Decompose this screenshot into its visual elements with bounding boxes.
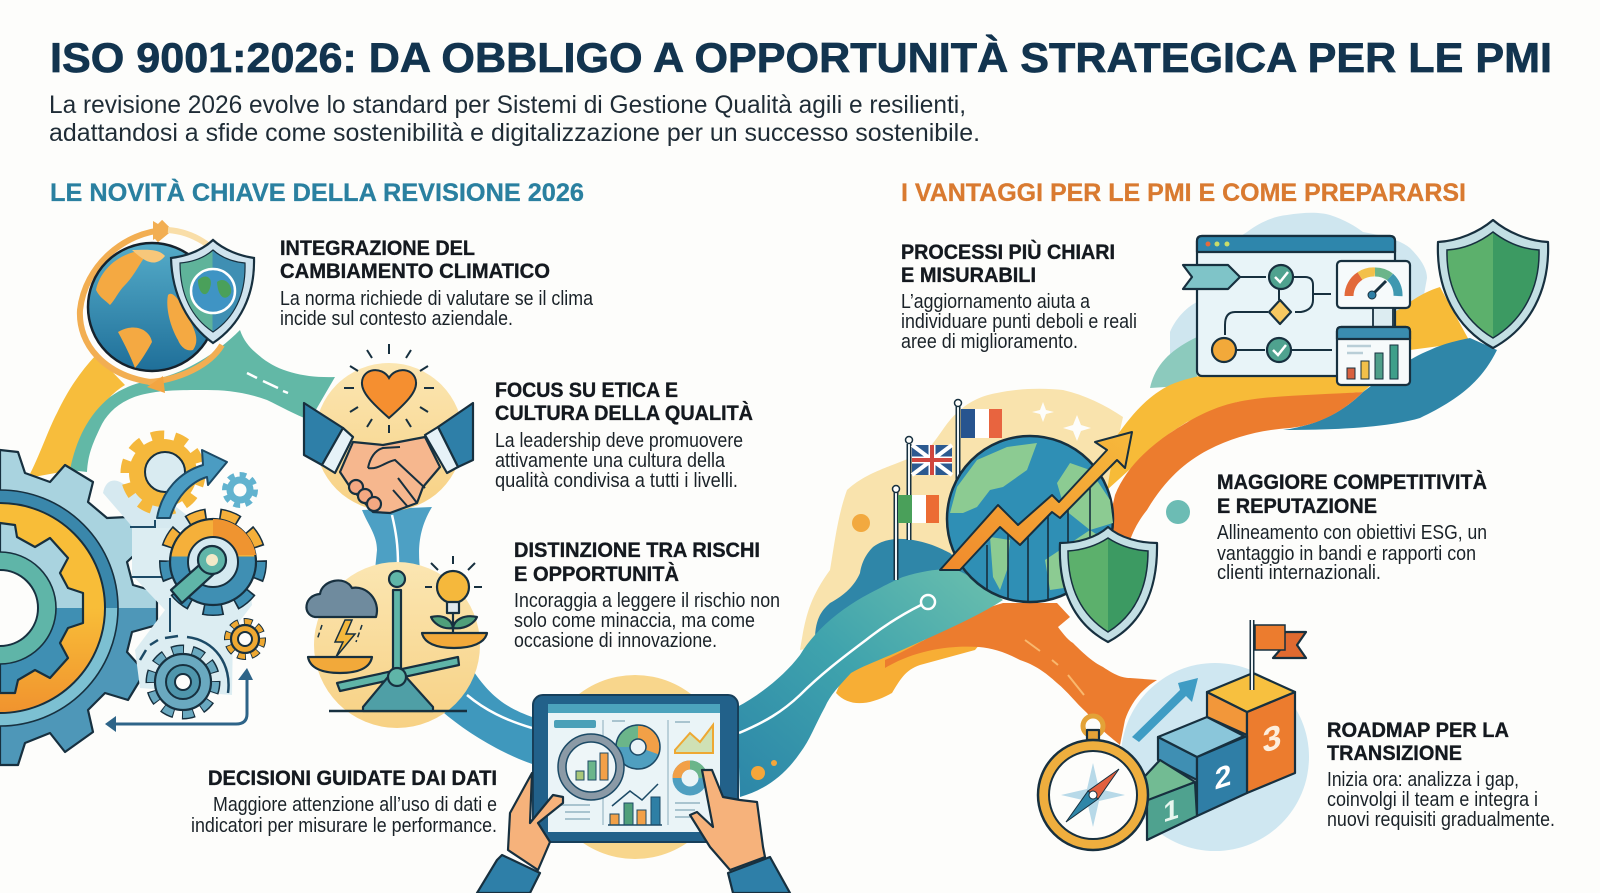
icon: teal dot bbox=[1166, 500, 1190, 524]
icon: left hand bbox=[508, 773, 563, 870]
text block: etica: CULTURA DELLA QUALITÀ bbox=[495, 402, 753, 425]
icon: process dashboard bbox=[1183, 236, 1410, 385]
icon: heart bbox=[362, 370, 416, 418]
icon: compass bbox=[1038, 716, 1148, 850]
icon: step 2: 2 bbox=[1215, 757, 1231, 797]
icon: left sleeve bbox=[304, 403, 343, 465]
text block: rischi: E OPPORTUNITÀ bbox=[514, 563, 679, 586]
icon: French flag bbox=[961, 409, 1002, 438]
icon: check step bbox=[1269, 265, 1293, 289]
text block: roadmap bbox=[1327, 719, 1555, 831]
text block: etica: La leadership deve promuovere bbox=[495, 429, 743, 452]
icon: right sleeve bbox=[728, 857, 790, 893]
text block: integrazione: incide sul contesto aziendale. bbox=[280, 307, 513, 330]
icon: blue gear bbox=[151, 650, 215, 714]
text block: processi: L’aggiornamento aiuta a bbox=[901, 290, 1091, 313]
text block: competitività bbox=[1217, 471, 1487, 584]
icon: step 1: 1 bbox=[1163, 793, 1179, 829]
icon: left sleeve bbox=[477, 855, 540, 893]
text block: dati bbox=[191, 767, 497, 837]
text block: processi: E MISURABILI bbox=[901, 264, 1036, 287]
text block: etica: FOCUS SU ETICA E bbox=[495, 379, 678, 402]
text block: competitività: clienti internazionali. bbox=[1217, 561, 1381, 584]
text block: roadmap: ROADMAP PER LA bbox=[1327, 719, 1509, 742]
text block: integrazione: La norma richiede di valutare se il clima bbox=[280, 287, 594, 310]
heading: vantaggi: I VANTAGGI PER LE PMI E COME PREPARARSI bbox=[901, 179, 1466, 207]
text block: competitività: E REPUTAZIONE bbox=[1217, 495, 1377, 518]
icon: orange dot bbox=[852, 514, 870, 532]
arrow: upward bbox=[1132, 678, 1198, 742]
icon: magnifier bbox=[558, 734, 624, 800]
subtitle: adattandosi a sfide come sostenibilità e digitalizzazione per un successo sostenibile. bbox=[49, 119, 980, 147]
text block: integrazione: CAMBIAMENTO CLIMATICO bbox=[280, 260, 550, 283]
text block: etica bbox=[495, 379, 753, 492]
icon: step 1 bbox=[1132, 760, 1197, 840]
text block: processi: PROCESSI PIÙ CHIARI bbox=[901, 240, 1115, 264]
text block: competitività: vantaggio in bandi e rapporti con bbox=[1217, 542, 1476, 565]
icon: lightbulb and plant bbox=[425, 556, 482, 633]
text block: competitività: MAGGIORE COMPETITIVITÀ bbox=[1217, 471, 1487, 494]
title: ISO 9001:2026: DA OBBLIGO A OPPORTUNITÀ STRATEGICA PER LE PMI bbox=[50, 34, 1552, 81]
icon: hands bbox=[340, 437, 440, 513]
text block: rischi: solo come minaccia, ma come bbox=[514, 609, 755, 632]
icon: shield with mini globe bbox=[171, 240, 254, 343]
icon: scale with risk and opportunity bbox=[306, 556, 487, 728]
icon: large green shield bbox=[1438, 220, 1548, 348]
icon: check step bbox=[1267, 338, 1291, 362]
icon: blue curved arrow bbox=[157, 450, 227, 518]
icon: storm cloud bbox=[306, 580, 377, 657]
icon: step 3: 3 bbox=[1263, 717, 1281, 761]
icon: gauge panel bbox=[1337, 261, 1410, 308]
text block: dati: DECISIONI GUIDATE DAI DATI bbox=[208, 767, 497, 790]
icon: UK flag bbox=[912, 445, 952, 475]
text block: etica: attivamente una cultura della bbox=[495, 449, 726, 472]
icon: flag on top bbox=[1252, 620, 1306, 690]
text block: rischi: occasione di innovazione. bbox=[514, 629, 717, 652]
icon: yellow gear bbox=[126, 436, 200, 510]
text block: processi: individuare punti deboli e reali bbox=[901, 310, 1137, 333]
text block: roadmap: TRANSIZIONE bbox=[1327, 742, 1462, 765]
text block: integrazione: INTEGRAZIONE DEL bbox=[280, 237, 475, 260]
icon: input tag bbox=[1183, 265, 1240, 289]
text block: roadmap: coinvolgi il team e integra i bbox=[1327, 788, 1538, 811]
text block: competitività: Allineamento con obiettivi ESG, un bbox=[1217, 521, 1487, 544]
icon: right sleeve bbox=[438, 403, 473, 467]
icon: donut chart bbox=[616, 725, 660, 769]
text block: rischi: DISTINZIONE TRA RISCHI bbox=[514, 539, 760, 562]
heading: novità chiave: LE NOVITÀ CHIAVE DELLA REVISIONE 2026 bbox=[50, 178, 584, 207]
icon: step 2 bbox=[1158, 717, 1247, 816]
arrow: growth bbox=[940, 432, 1132, 570]
icon: globe with growth arrow bbox=[940, 432, 1157, 642]
text block: roadmap: Inizia ora: analizza i gap, bbox=[1327, 768, 1519, 791]
icon: roadmap steps and compass bbox=[1038, 620, 1309, 851]
subtitle bbox=[49, 91, 980, 147]
icon: orange and blue gear with wrench bbox=[166, 515, 260, 609]
text block: rischi: Incoraggia a leggere il rischio non bbox=[514, 589, 780, 612]
icon: teal small gear bbox=[225, 475, 255, 505]
icon: heart and handshake bbox=[304, 344, 473, 513]
icon: step 3 bbox=[1207, 673, 1295, 793]
right flowing ribbons bbox=[737, 213, 1497, 797]
icon: bar chart with trend bbox=[608, 784, 662, 825]
icon: decision diamond bbox=[1269, 300, 1291, 324]
text block: processi: aree di miglioramento. bbox=[901, 330, 1078, 353]
text block: integrazione bbox=[280, 237, 594, 330]
text block: processi bbox=[901, 240, 1137, 353]
icon: green shield bbox=[1060, 527, 1157, 642]
icon: small yellow gear bbox=[228, 622, 262, 656]
icon: small gears cluster bbox=[103, 436, 262, 732]
icon: bar chart panel bbox=[1337, 327, 1410, 385]
icon: cuffs bbox=[322, 427, 458, 473]
text block: etica: qualità condivisa a tutti i livelli. bbox=[495, 469, 738, 492]
icon: start node bbox=[1212, 338, 1236, 362]
arrow: orbit around gear bbox=[140, 636, 229, 693]
icon: area chart bbox=[675, 725, 713, 753]
sparkles bbox=[1032, 402, 1091, 441]
text block: rischi bbox=[514, 539, 780, 652]
icon: flags bbox=[892, 400, 1002, 580]
text block: roadmap: nuovi requisiti gradualmente. bbox=[1327, 808, 1555, 831]
left connecting ribbons bbox=[28, 330, 535, 765]
text block: dati: Maggiore attenzione all’uso di dati e bbox=[213, 793, 497, 816]
icon: right hand pointing bbox=[690, 770, 765, 870]
icon: large gear bbox=[0, 450, 157, 765]
arrow: feedback loop bbox=[105, 668, 253, 732]
icon: second donut bbox=[677, 765, 703, 791]
icon: globe with shield bbox=[80, 221, 254, 393]
icon: tablet with charts bbox=[477, 675, 790, 893]
subtitle: La revisione 2026 evolve lo standard per Sistemi di Gestione Qualità agili e resilienti, bbox=[49, 91, 966, 119]
icon: Italian flag bbox=[898, 495, 939, 523]
text block: dati: indicatori per misurare le performance. bbox=[191, 814, 497, 837]
icon: balance bbox=[337, 657, 459, 691]
